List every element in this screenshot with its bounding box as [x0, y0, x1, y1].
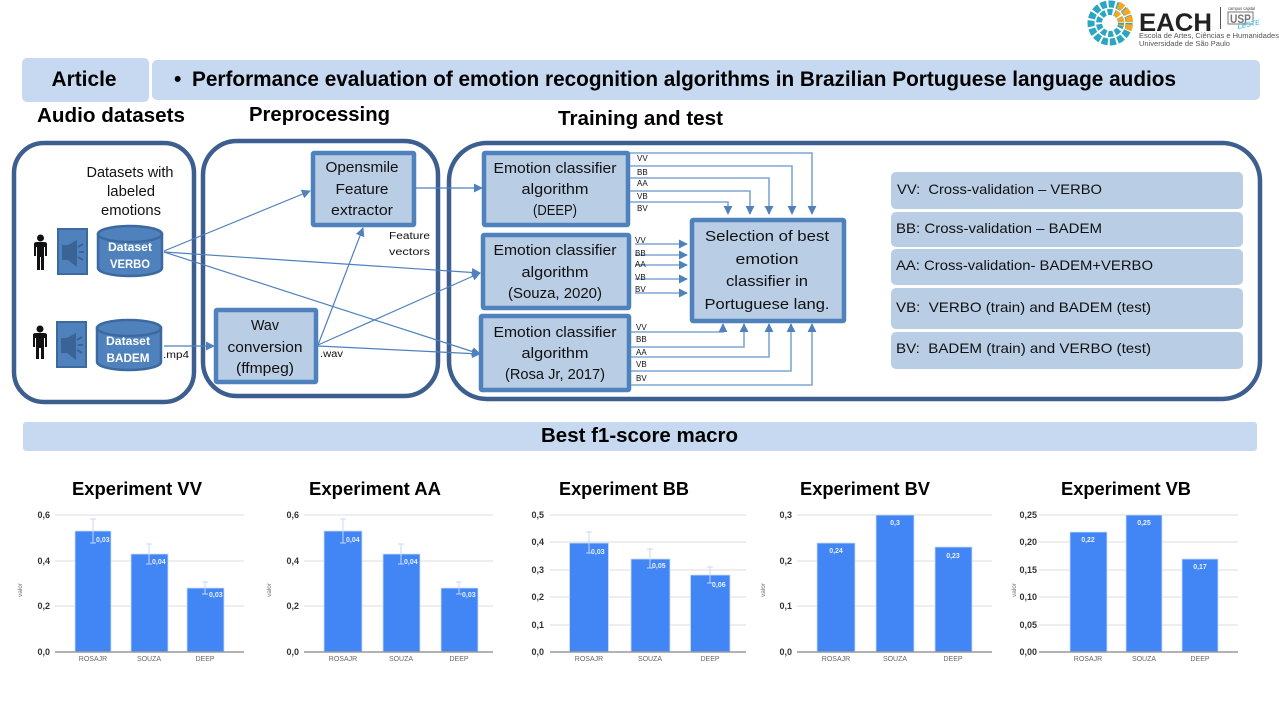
- box: Wav conversion: Wav: [251, 318, 280, 334]
- heading: Training and test: Training and test: [558, 108, 723, 130]
- chart: Experiment BB: 0,5: [531, 510, 544, 520]
- cylinder: dataset BADEM: BADEM: [106, 351, 150, 365]
- box: classifier Souza: (Souza, 2020): [508, 286, 602, 302]
- chart: Experiment VB: ROSAJR: [1074, 656, 1102, 663]
- box: classifier Rosa Jr: Emotion classifier: [494, 325, 617, 341]
- chart: Experiment AA: 0,6: [286, 510, 299, 520]
- chart: Experiment AA: [266, 479, 493, 663]
- chart: Experiment BB: 0,05: [652, 563, 666, 570]
- logo: EACH USP: [1091, 4, 1279, 48]
- chart: Experiment BV: 0,23: [946, 553, 960, 560]
- chart: Experiment BV: valor: [760, 582, 767, 597]
- arrows: DEEP outputs: VV: [637, 154, 648, 163]
- section banner: best f1-score macro: [23, 422, 1257, 451]
- legend row AA: [891, 249, 1243, 285]
- chart: Experiment AA: 0,04: [404, 559, 418, 566]
- box: selection of best classifier: Portuguese lang.: [704, 297, 830, 313]
- box: selection of best classifier: Selection of best: [705, 229, 829, 245]
- legend row BB: BB: Cross-validation – BADEM: [896, 220, 1102, 236]
- chart: Experiment VV: 0,03: [209, 592, 223, 599]
- chart: Experiment BV: 0,3: [890, 520, 900, 527]
- chart: Experiment BB: 0,0: [531, 647, 544, 657]
- arrows: Rosa Jr outputs: AA: [636, 348, 647, 357]
- icon: speaker top: [58, 229, 87, 274]
- cylinder: dataset VERBO: VERBO: [110, 257, 150, 271]
- arrows: DEEP outputs: AA: [637, 179, 648, 188]
- box: selection of best classifier: classifier in: [726, 274, 808, 290]
- arrows: Souza outputs: VV: [635, 236, 646, 245]
- legend row BB: [891, 212, 1243, 247]
- chart: Experiment VV: 0,2: [37, 601, 50, 611]
- legend row AA: AA: Cross-validation- BADEM+VERBO: [896, 257, 1153, 273]
- chart: Experiment AA: DEEP: [449, 656, 469, 663]
- chart: Experiment BV: 0,2: [779, 556, 792, 566]
- chart: Experiment BB: 0,4: [531, 537, 544, 547]
- chart: Experiment BB: 0,3: [531, 565, 544, 575]
- text: datasets with labeled emotions: Datasets with: [86, 165, 174, 181]
- cylinder: dataset BADEM: Dataset: [106, 334, 150, 348]
- chart: Experiment VB: DEEP: [1190, 656, 1210, 663]
- box: selection of best classifier: [692, 220, 844, 321]
- chart: Experiment AA: 0,03: [462, 592, 476, 599]
- chart: Experiment VB: 0,20: [1019, 537, 1037, 547]
- arrows: Souza outputs: BV: [635, 285, 646, 294]
- text: datasets with labeled emotions: [86, 165, 174, 219]
- chart: Experiment VV: SOUZA: [137, 656, 161, 663]
- chart: Experiment BB: 0,03: [591, 549, 605, 556]
- chart: Experiment BV: [760, 479, 992, 663]
- box: Opensmile feature extractor: Opensmile: [326, 160, 398, 176]
- text: datasets with labeled emotions: emotions: [101, 203, 161, 219]
- chart: Experiment BB: 0,2: [531, 592, 544, 602]
- chart: Experiment BV: 0,0: [779, 647, 792, 657]
- arrows: Rosa Jr outputs: BB: [636, 335, 647, 344]
- label: feature vectors: Feature: [389, 231, 431, 242]
- box: classifier DEEP: [484, 153, 628, 225]
- cylinder: dataset VERBO: Dataset: [108, 240, 152, 254]
- logo: EACH USP: Escola de Artes, Ciências e Humanidades: [1139, 31, 1279, 40]
- box: classifier Rosa Jr: (Rosa Jr, 2017): [505, 367, 605, 383]
- header: article title: •: [174, 68, 181, 91]
- chart: Experiment VV: 0,04: [152, 559, 166, 566]
- chart: Experiment BB: DEEP: [700, 656, 720, 663]
- cylinder: dataset VERBO: [98, 226, 162, 276]
- header: Article label: Article: [52, 68, 116, 91]
- arrows: DEEP outputs: [630, 153, 812, 214]
- arrows: Souza outputs: VB: [635, 273, 646, 282]
- legend row VV: [891, 172, 1243, 209]
- box: Opensmile feature extractor: Feature: [336, 182, 388, 198]
- box: selection of best classifier: emotion: [736, 252, 798, 268]
- logo: EACH USP: LESTE: [1237, 19, 1261, 31]
- chart: Experiment VB: valor: [1011, 582, 1018, 597]
- chart: Experiment BV: 0,24: [829, 548, 843, 555]
- chart: Experiment VB: 0,05: [1019, 620, 1037, 630]
- box: Opensmile feature extractor: [313, 153, 414, 225]
- chart: Experiment VB: 0,17: [1193, 564, 1207, 571]
- logo: EACH USP: campus capital: [1228, 6, 1255, 11]
- box: Wav conversion: (ffmpeg): [236, 361, 294, 377]
- arrows: DEEP outputs: BB: [637, 168, 648, 177]
- arrows: DEEP outputs: BV: [637, 204, 648, 213]
- chart: Experiment VB: 0,22: [1081, 537, 1095, 544]
- chart: Experiment VV: 0,0: [37, 647, 50, 657]
- chart: Experiment AA: valor: [266, 582, 273, 597]
- chart: Experiment VB: SOUZA: [1132, 656, 1156, 663]
- chart: Experiment BB: [531, 479, 746, 663]
- chart: Experiment BV: 0,1: [779, 601, 792, 611]
- chart: Experiment AA: 0,0: [286, 647, 299, 657]
- chart: Experiment BB: 0,1: [531, 620, 544, 630]
- panel: audio datasets: [14, 143, 194, 402]
- chart: Experiment VV: DEEP: [195, 656, 215, 663]
- arrows: Souza outputs: AA: [635, 260, 646, 269]
- icon: person bottom: [33, 326, 47, 359]
- box: Wav conversion: [216, 310, 316, 382]
- chart: Experiment BB: 0,06: [712, 582, 726, 589]
- header: article title: Performance evaluation of emotion recognition algorithms in Brazilian Portuguese language audios: [192, 68, 1176, 91]
- box: classifier Souza: algorithm: [522, 265, 588, 281]
- chart: Experiment BV: Experiment BV: [800, 479, 930, 499]
- legend row VV: VV: Cross-validation – VERBO: [897, 181, 1102, 197]
- legend row BV: [891, 332, 1243, 369]
- chart: Experiment VB: 0,15: [1019, 565, 1037, 575]
- chart: Experiment AA: 0,04: [346, 537, 360, 544]
- cylinder: dataset BADEM: [97, 320, 161, 370]
- arrows: Rosa Jr outputs: VV: [636, 323, 647, 332]
- arrows: Souza outputs: [635, 236, 687, 294]
- arrows: Rosa Jr outputs: BV: [636, 374, 647, 383]
- arrows: Rosa Jr outputs: [631, 323, 812, 385]
- icon: speaker bottom: [57, 322, 86, 367]
- chart: Experiment AA: 0,4: [286, 556, 299, 566]
- chart: Experiment VB: [1011, 479, 1238, 663]
- legend row BV: BV: BADEM (train) and VERBO (test): [896, 340, 1151, 356]
- chart: Experiment VB: 0,25: [1019, 510, 1037, 520]
- legend row VB: VB: VERBO (train) and BADEM (test): [896, 299, 1151, 315]
- chart: Experiment VB: 0,00: [1019, 647, 1037, 657]
- logo: EACH USP: EACH: [1139, 9, 1212, 37]
- chart: Experiment BV: 0,3: [779, 510, 792, 520]
- box: Opensmile feature extractor: extractor: [331, 203, 393, 219]
- label: feature vectors: vectors: [389, 247, 430, 258]
- chart: Experiment VV: valor: [17, 582, 24, 597]
- chart: Experiment BB: ROSAJR: [575, 656, 603, 663]
- header: article title: [152, 60, 1260, 100]
- label: feature vectors: [389, 231, 431, 258]
- legend row VB: [891, 288, 1243, 329]
- box: Wav conversion: conversion: [228, 340, 302, 356]
- box: classifier DEEP: algorithm: [522, 182, 588, 198]
- chart: Experiment BV: SOUZA: [883, 656, 907, 663]
- heading: Audio datasets: Audio datasets: [37, 105, 185, 127]
- chart: Experiment BB: Experiment BB: [559, 479, 689, 499]
- chart: Experiment VV: [17, 479, 244, 663]
- box: classifier Rosa Jr: [481, 316, 629, 390]
- box: classifier DEEP: Emotion classifier: [494, 161, 617, 177]
- chart: Experiment BV: DEEP: [943, 656, 963, 663]
- chart: Experiment VB: Experiment VB: [1061, 479, 1191, 499]
- chart: Experiment AA: ROSAJR: [329, 656, 357, 663]
- label: wav: .wav: [320, 349, 343, 360]
- chart: Experiment AA: 0,2: [286, 601, 299, 611]
- logo: EACH USP: Universidade de São Paulo: [1139, 39, 1230, 48]
- chart: Experiment BB: SOUZA: [638, 656, 662, 663]
- chart: Experiment VV: Experiment VV: [72, 479, 202, 499]
- chart: Experiment VB: 0,25: [1137, 520, 1151, 527]
- text: datasets with labeled emotions: labeled: [107, 184, 155, 200]
- arrows: Rosa Jr outputs: VB: [636, 360, 647, 369]
- box: classifier DEEP: (DEEP): [533, 203, 577, 219]
- header: Article label: [22, 58, 149, 102]
- heading: Preprocessing: Preprocessing: [249, 104, 390, 126]
- chart: Experiment VV: 0,4: [37, 556, 50, 566]
- panel: preprocessing: [203, 141, 438, 396]
- icon: person top: [34, 234, 47, 270]
- legend: experiment definitions: [891, 172, 1243, 369]
- chart: Experiment AA: SOUZA: [389, 656, 413, 663]
- chart: Experiment VV: ROSAJR: [79, 656, 107, 663]
- box: classifier Rosa Jr: algorithm: [522, 346, 588, 362]
- panel: training and test: [449, 143, 1260, 399]
- section banner: best f1-score macro: Best f1-score macro: [541, 425, 738, 447]
- arrows: DEEP outputs: VB: [637, 192, 648, 201]
- box: classifier Souza: Emotion classifier: [494, 243, 617, 259]
- chart: Experiment VB: 0,10: [1019, 592, 1037, 602]
- chart: Experiment BV: ROSAJR: [822, 656, 850, 663]
- logo: EACH USP: USP: [1230, 12, 1251, 26]
- chart: Experiment AA: Experiment AA: [309, 479, 441, 499]
- label: mp4: .mp4: [163, 350, 190, 361]
- arrows: Souza outputs: BB: [635, 249, 646, 258]
- arrows: pipeline connections: [164, 188, 482, 354]
- box: classifier Souza: [483, 235, 629, 308]
- chart: Experiment VV: 0,6: [37, 510, 50, 520]
- chart: Experiment VV: 0,03: [96, 537, 110, 544]
